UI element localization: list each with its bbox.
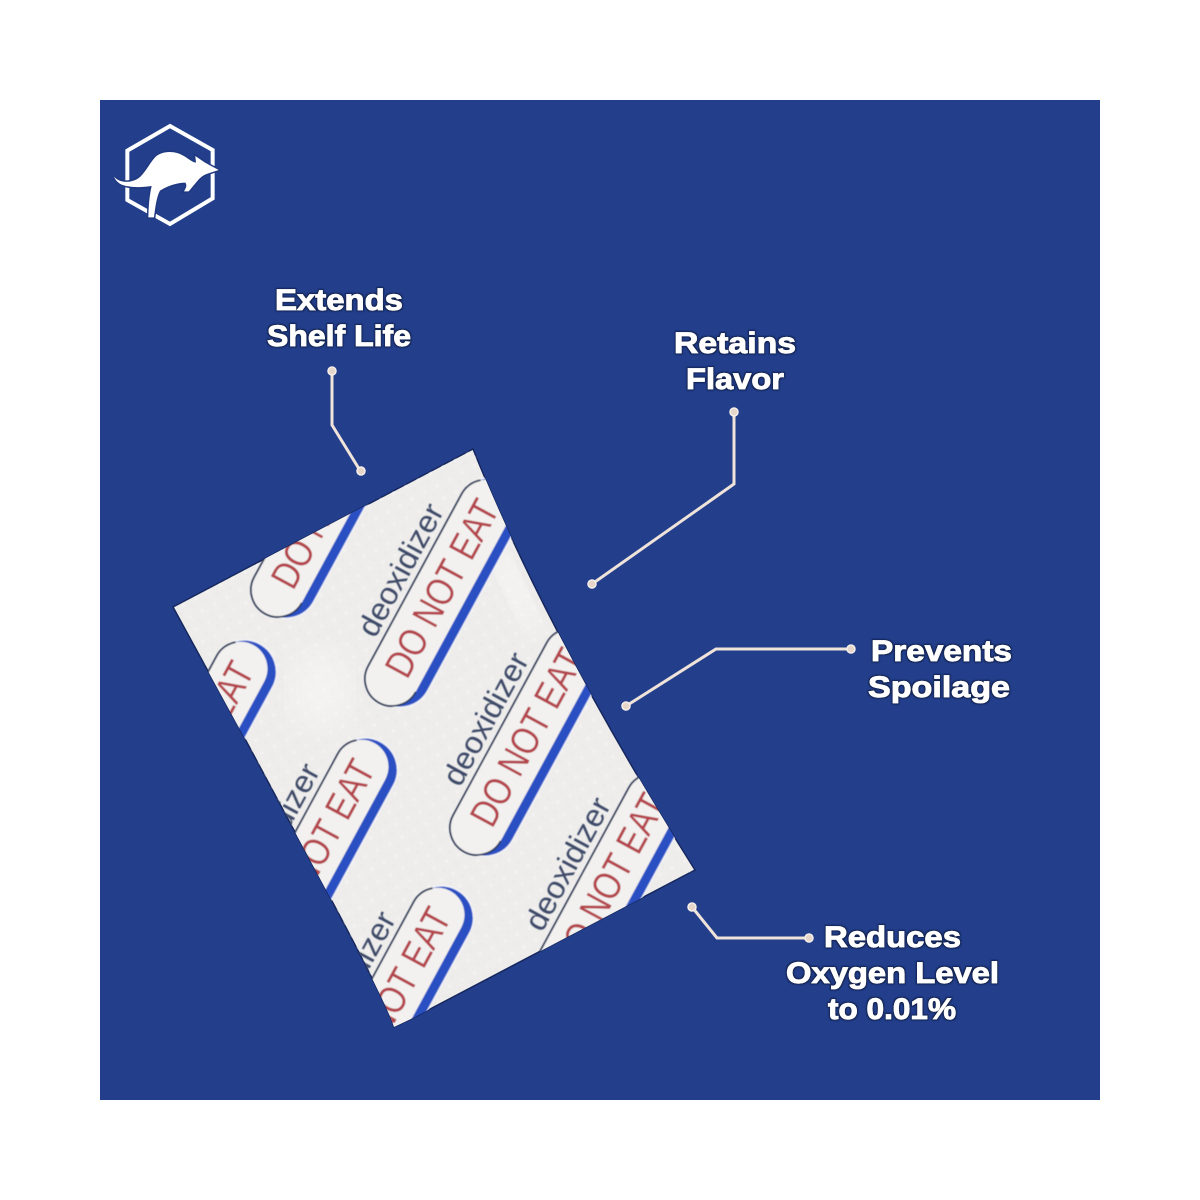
panel: deoxidizer packet	[172, 448, 696, 1028]
callout: Extends Shelf Life: Shelf Life	[267, 320, 411, 353]
callout: Prevents Spoilage: Spoilage	[868, 671, 1010, 704]
pill: middle DO NOT EAT: deoxidizer	[435, 646, 536, 791]
panel: blue background	[100, 100, 1100, 1100]
pill: bottom OT EAT: DO NOT EAT	[329, 901, 460, 1093]
callout: Reduces Oxygen Level to 0.01%: Reduces	[824, 921, 961, 954]
pill: lower-left OT EAT	[278, 738, 398, 902]
pill: lower-right DO NOT EAT	[528, 776, 676, 952]
callout: Prevents Spoilage	[868, 635, 1012, 704]
callout: Retains Flavor: Flavor	[686, 363, 784, 396]
icon: kangaroo hexagon logo	[114, 126, 219, 224]
pill: center DO NOT EAT	[360, 476, 512, 708]
callout: Reduces Oxygen Level to 0.01%: to 0.01%	[828, 993, 956, 1026]
pill: lower-left OT EAT: deoxidizer	[226, 757, 327, 902]
pill: middle DO NOT EAT	[446, 630, 592, 857]
callout: Prevents Spoilage: Prevents	[871, 635, 1012, 668]
arrow: Reduces Oxygen Level connector	[688, 903, 813, 942]
callout: Reduces Oxygen Level to 0.01%	[786, 921, 999, 1026]
callout: Retains Flavor	[674, 327, 796, 396]
pill: center DO NOT EAT: deoxidizer	[350, 497, 451, 642]
pill: bottom OT EAT	[359, 886, 474, 1027]
pill: middle DO NOT EAT: DO NOT EAT	[462, 642, 593, 834]
pill: lower-right DO NOT EAT: deoxidizer	[517, 791, 618, 936]
callout: Extends Shelf Life: Extends	[275, 284, 403, 317]
pill: left AT: DO NOT EAT	[132, 655, 263, 847]
callout: Extends Shelf Life	[267, 284, 411, 353]
pill: lower-right DO NOT EAT: DO NOT EAT	[544, 787, 675, 979]
pill: lower-left OT EAT: DO NOT EAT	[253, 753, 384, 945]
arrow: Retains Flavor connector	[588, 408, 738, 588]
callout: Reduces Oxygen Level to 0.01%: Oxygen Level	[786, 957, 999, 990]
pill: center DO NOT EAT: DO NOT EAT	[377, 493, 508, 685]
pill: top-left DO: DO NOT EAT	[263, 404, 394, 596]
pill: left AT	[208, 640, 277, 740]
arrow: Prevents Spoilage connector	[622, 645, 855, 710]
pill: top-left DO	[249, 504, 368, 619]
arrow: Extends Shelf Life connector	[328, 367, 365, 475]
pill: bottom OT EAT: deoxidizer	[302, 905, 403, 1050]
callout: Retains Flavor: Retains	[674, 327, 796, 360]
